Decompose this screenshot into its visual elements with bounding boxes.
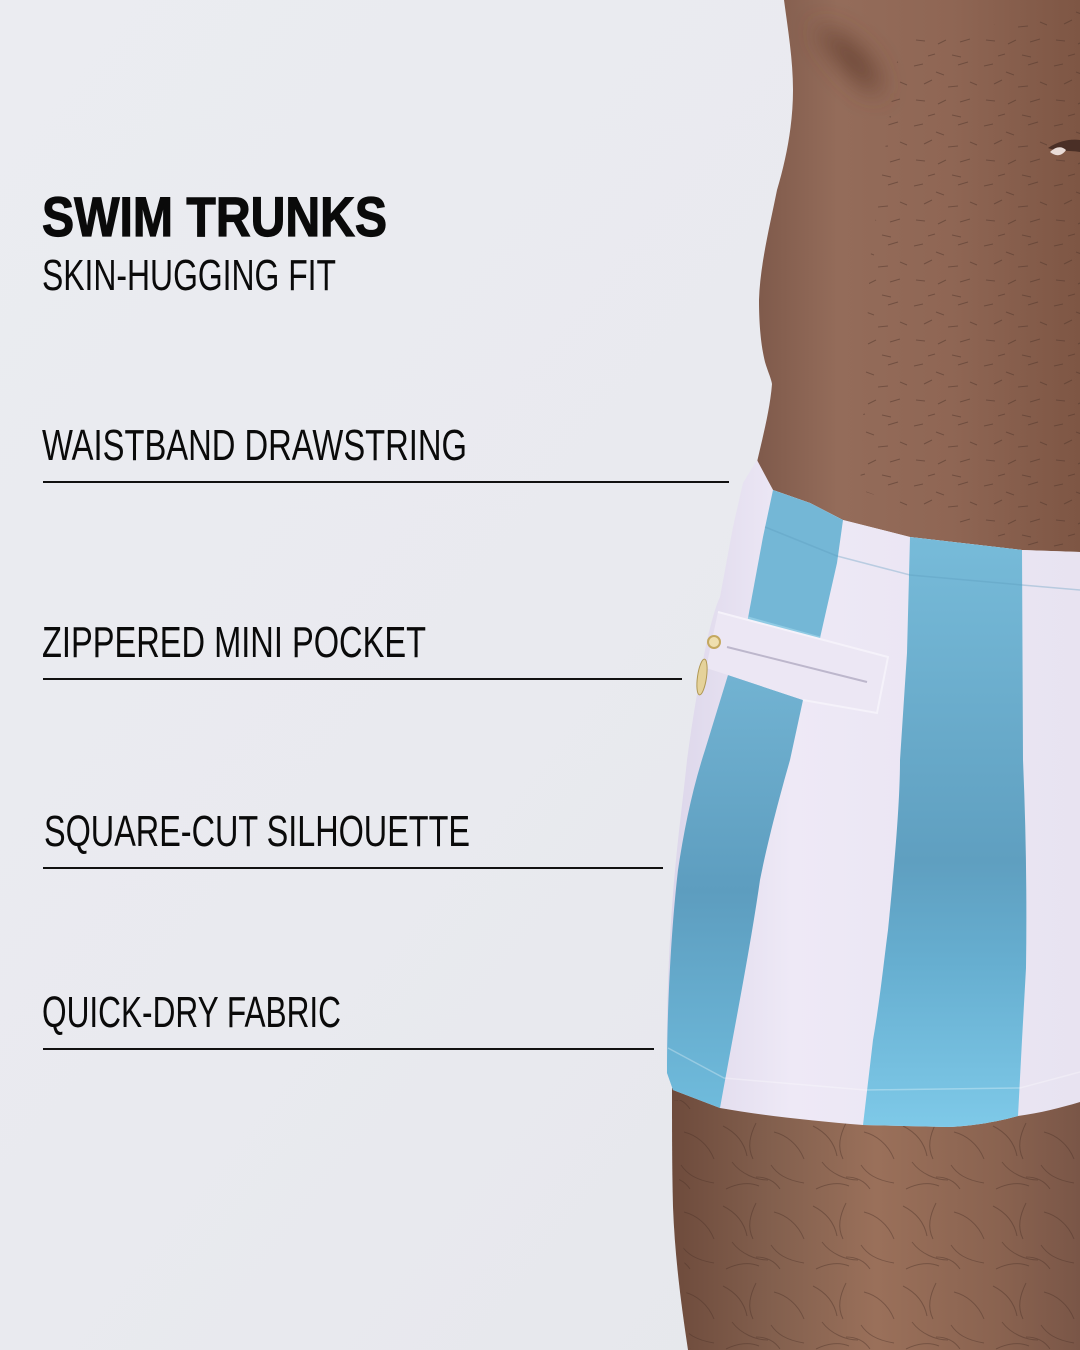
leg [672,1088,1080,1350]
model photo: torso, leg and striped trunks [667,0,1080,1350]
title: SWIM TRUNKS [42,185,387,248]
zippered pocket [706,612,888,713]
leg hair [674,1100,1080,1350]
stripe: upper left [748,490,843,638]
subtitle: SKIN-HUGGING FIT [42,251,336,300]
navel [1048,140,1080,155]
torso [757,0,1080,552]
hem seam [668,1048,1080,1090]
feature: zippered mini pocket: ZIPPERED MINI POCKET [42,618,426,667]
feature: square-cut silhouette: SQUARE-CUT SILHOUETTE [44,807,470,856]
stripe: lower left [667,675,803,1108]
feature: waistband drawstring: WAISTBAND DRAWSTRING [42,421,467,470]
torso stubble [860,10,1080,548]
stripe: centre [863,537,1026,1127]
feature: quick-dry fabric: QUICK-DRY FABRIC [42,988,341,1037]
waistband seam [765,527,1080,590]
zipper pull [695,636,720,695]
rib shadow [815,25,880,95]
trunks base [667,460,1080,1127]
